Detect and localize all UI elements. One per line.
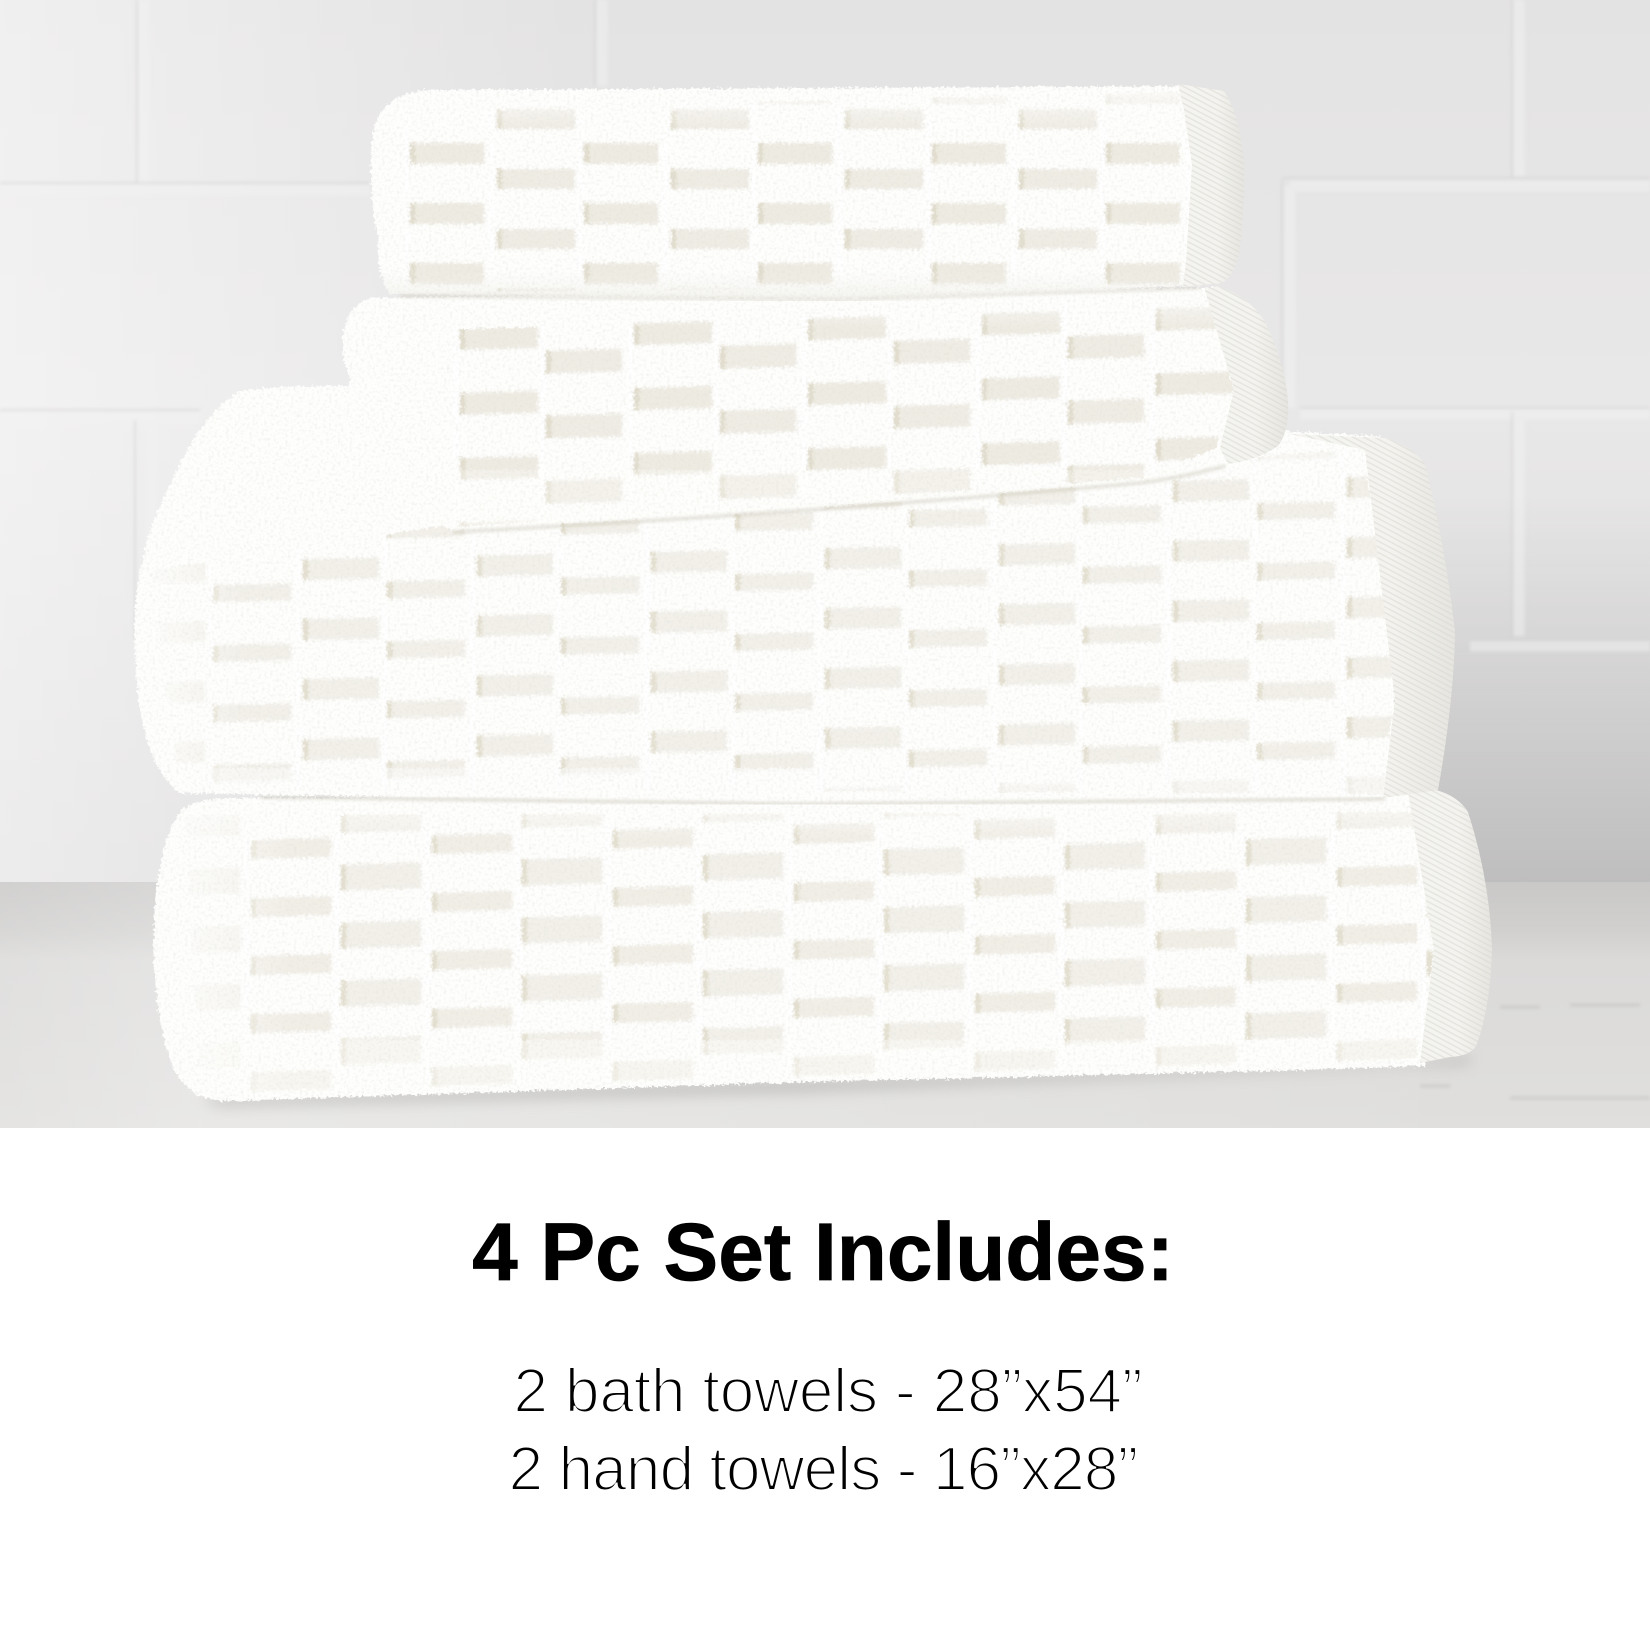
heading: 4 Pc Set Includes:	[472, 1207, 1174, 1298]
towel 3: upper bath towel	[125, 380, 1455, 810]
seam between towels 1 and 2	[400, 288, 1200, 300]
towel 2: woven border band	[1205, 286, 1288, 464]
towel 4: bottom bath towel	[140, 780, 1492, 1110]
towel 3: woven border band	[1290, 434, 1455, 798]
towel 4: woven border band	[1408, 790, 1492, 1063]
seam between towels 2 and 3	[453, 466, 1225, 532]
seam between towels 3 and 4	[260, 797, 1385, 804]
towel 1: top hand towel	[360, 80, 1244, 305]
counter: marble surface	[0, 882, 1650, 1128]
product photo: stack of four white towels	[0, 0, 1650, 1128]
text: hand towels size: 2 hand towels - 16”x28”	[509, 1435, 1137, 1504]
text: bath towels size: 2 bath towels - 28”x54”	[513, 1357, 1143, 1426]
wall: white subway tile background	[0, 0, 1650, 900]
towel 1: woven border band	[1178, 84, 1244, 287]
shadow beneath the stack	[200, 1056, 1470, 1106]
towel 2: lower hand towel	[330, 280, 1288, 540]
